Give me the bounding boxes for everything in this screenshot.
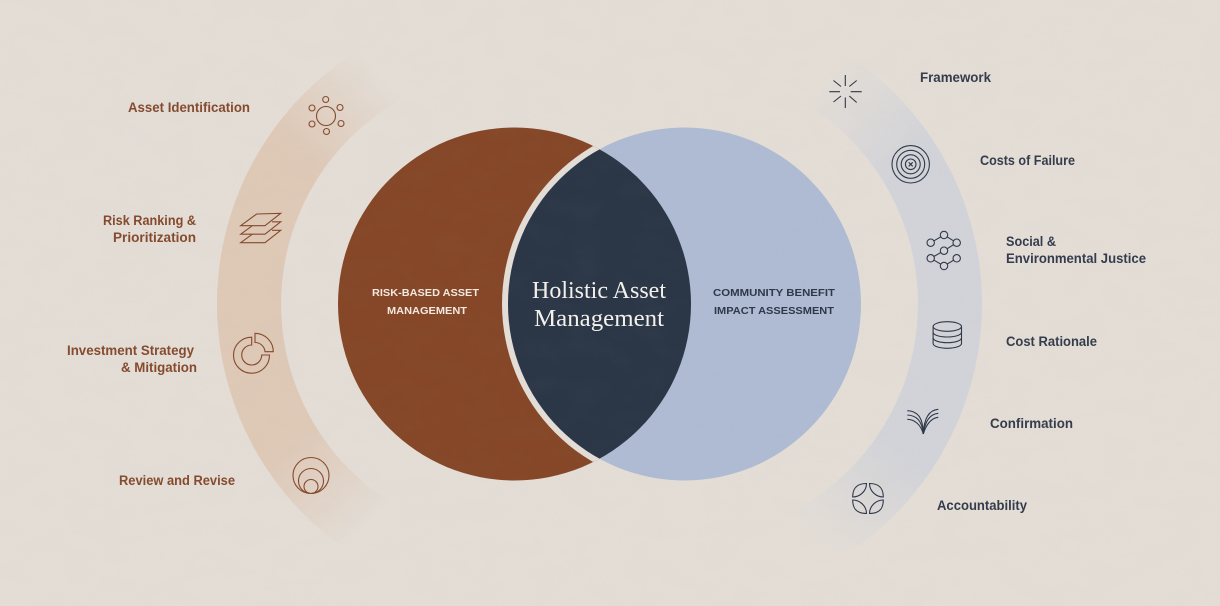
- label: social and environmental justice: Social &: [1006, 234, 1056, 249]
- left arc band: [217, 6, 515, 602]
- icon: asset identification nodes: [309, 96, 344, 134]
- label: risk-based asset management: MANAGEMENT: [387, 305, 468, 317]
- label: investment strategy and mitigation: Investment Strategy: [67, 343, 194, 358]
- label: risk ranking and prioritization: Risk Ranking &: [103, 213, 196, 228]
- label: review and revise: Review and Revise: [119, 473, 235, 488]
- overlap: holistic asset management: [508, 150, 691, 458]
- label: accountability: Accountability: [937, 498, 1027, 513]
- label: social and environmental justice: [1006, 234, 1146, 266]
- label: community benefit impact assessment: COMMUNITY BENEFIT: [713, 287, 836, 299]
- icon: burst: [829, 75, 862, 108]
- title: [532, 278, 666, 332]
- label: cost rationale: Cost Rationale: [1006, 334, 1097, 349]
- label: investment strategy and mitigation: [67, 343, 197, 375]
- label: risk ranking and prioritization: [103, 213, 196, 245]
- label: costs of failure: Costs of Failure: [980, 153, 1075, 168]
- label: investment strategy and mitigation: & Mitigation: [121, 360, 197, 375]
- label: social and environmental justice: Environmental Justice: [1006, 251, 1146, 266]
- label: risk ranking and prioritization: Prioritization: [113, 230, 196, 245]
- title: Holistic Asset: [532, 278, 666, 304]
- icon: stacked layers: [241, 213, 281, 243]
- icon: ring chart: [234, 333, 273, 373]
- lens outline: [502, 146, 600, 462]
- icon: target: [892, 146, 929, 183]
- circle: community benefit: [508, 128, 861, 480]
- icon: database: [933, 322, 962, 348]
- icon: plant: [907, 409, 938, 434]
- icon: network: [927, 231, 960, 270]
- label: confirmation: Confirmation: [990, 416, 1073, 431]
- label: community benefit impact assessment: IMPACT ASSESSMENT: [714, 305, 835, 317]
- title: Management: [534, 306, 664, 332]
- label: community benefit impact assessment: [713, 287, 836, 317]
- label: framework: Framework: [920, 70, 991, 85]
- venn diagram: [338, 122, 867, 486]
- label: risk-based asset management: [372, 287, 480, 317]
- right arc band: [684, 6, 982, 602]
- label: risk-based asset management: RISK-BASED ASSET: [372, 287, 480, 299]
- circle: risk-based asset management: [338, 128, 691, 480]
- icon: nested circles: [293, 458, 329, 494]
- label: asset identification: Asset Identification: [128, 100, 250, 115]
- icon: four leaves: [853, 484, 883, 514]
